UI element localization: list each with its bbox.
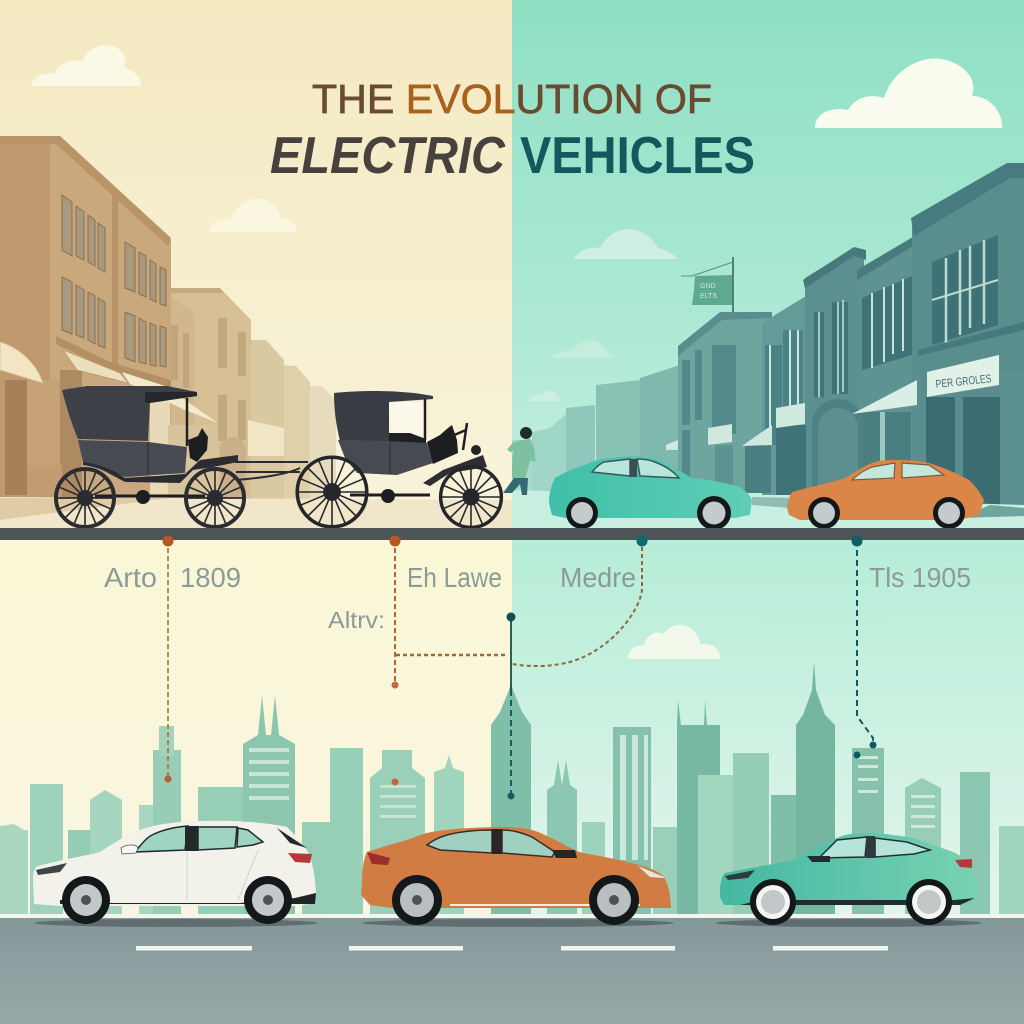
title: ELECTRIC bbox=[270, 127, 506, 185]
car: orange sedan bbox=[361, 827, 671, 925]
left street: vintage buildings bbox=[0, 136, 512, 528]
axle and rods bbox=[95, 494, 205, 498]
upper road bbox=[0, 528, 1024, 540]
car: teal sedan on upper road bbox=[549, 456, 752, 530]
timeline labels: 1809 bbox=[180, 562, 241, 593]
wheel rear bbox=[56, 469, 114, 527]
lower road bbox=[0, 914, 1024, 1024]
seat and driver bbox=[427, 425, 458, 464]
cloud: distant right bbox=[550, 340, 615, 358]
timeline connector: Tls 1905 bbox=[852, 536, 876, 758]
building E bbox=[678, 312, 772, 492]
shop sign: PER GROLES bbox=[935, 373, 992, 391]
carriage: first bbox=[56, 386, 308, 527]
driver bbox=[188, 428, 208, 462]
building D bbox=[762, 296, 806, 495]
timeline labels: Tls 1905 bbox=[869, 562, 971, 593]
timeline connector: central bbox=[506, 612, 516, 800]
building B bbox=[857, 237, 918, 497]
cloud: top right bbox=[815, 58, 1002, 128]
timeline connector: Eh Lawe bbox=[390, 536, 505, 786]
wheel front bbox=[441, 467, 501, 527]
flag bbox=[681, 257, 733, 312]
title: THE EVOLUTION OF bbox=[312, 76, 712, 122]
car: white hatchback bbox=[33, 821, 316, 924]
cloud: horizon right bbox=[527, 391, 562, 401]
timeline connector: Arto 1809 bbox=[162, 536, 174, 782]
building A bbox=[912, 164, 1024, 505]
window bbox=[389, 402, 425, 438]
timeline labels: Eh Lawe bbox=[407, 562, 502, 593]
cloud: small left bbox=[209, 198, 297, 232]
person walking bbox=[503, 427, 536, 495]
main building front face bbox=[50, 136, 171, 505]
canopy and upper panel bbox=[334, 391, 433, 441]
title: VEHICLES bbox=[520, 127, 755, 185]
wheel rear large bbox=[297, 457, 367, 527]
cloud: top left bbox=[31, 45, 141, 86]
car: green sedan bbox=[720, 833, 979, 925]
storefront bbox=[5, 370, 218, 500]
timeline labels: Arto bbox=[104, 562, 157, 593]
fender bbox=[83, 455, 238, 483]
title bbox=[270, 76, 755, 185]
shop sign bbox=[927, 355, 999, 397]
wheel front bbox=[186, 469, 244, 527]
awnings bbox=[852, 380, 917, 414]
building C bbox=[805, 248, 864, 497]
ground bbox=[512, 490, 1024, 528]
cloud: lower panel bbox=[628, 625, 720, 659]
fender bbox=[423, 455, 487, 486]
carriage: second bbox=[297, 391, 501, 527]
timeline labels bbox=[104, 562, 971, 633]
panel: present background bbox=[512, 0, 1024, 920]
right street: modern buildings bbox=[512, 163, 1024, 528]
cloud: small right bbox=[573, 229, 678, 259]
main building side face bbox=[0, 136, 60, 505]
car: orange sedan on upper road bbox=[787, 460, 984, 529]
timeline labels: Medre bbox=[560, 562, 636, 593]
skyline bbox=[0, 662, 1024, 918]
timeline connector: Medre bbox=[512, 536, 648, 666]
awning: middle bbox=[63, 350, 128, 383]
sidewalk bbox=[0, 497, 512, 528]
timeline labels: Altrv: bbox=[328, 607, 385, 633]
shopfronts bbox=[715, 370, 1024, 505]
far buildings bbox=[164, 288, 336, 505]
windows bbox=[62, 195, 166, 367]
awning: left bbox=[0, 342, 43, 383]
lower panel bbox=[78, 440, 187, 477]
canopy and upper panel bbox=[62, 386, 197, 441]
lower panel bbox=[338, 440, 433, 475]
axle bbox=[350, 494, 430, 496]
distant buildings bbox=[512, 365, 680, 500]
flag: GND bbox=[700, 283, 716, 290]
flag: ELTS bbox=[700, 293, 717, 300]
panel: past background bbox=[0, 0, 512, 920]
